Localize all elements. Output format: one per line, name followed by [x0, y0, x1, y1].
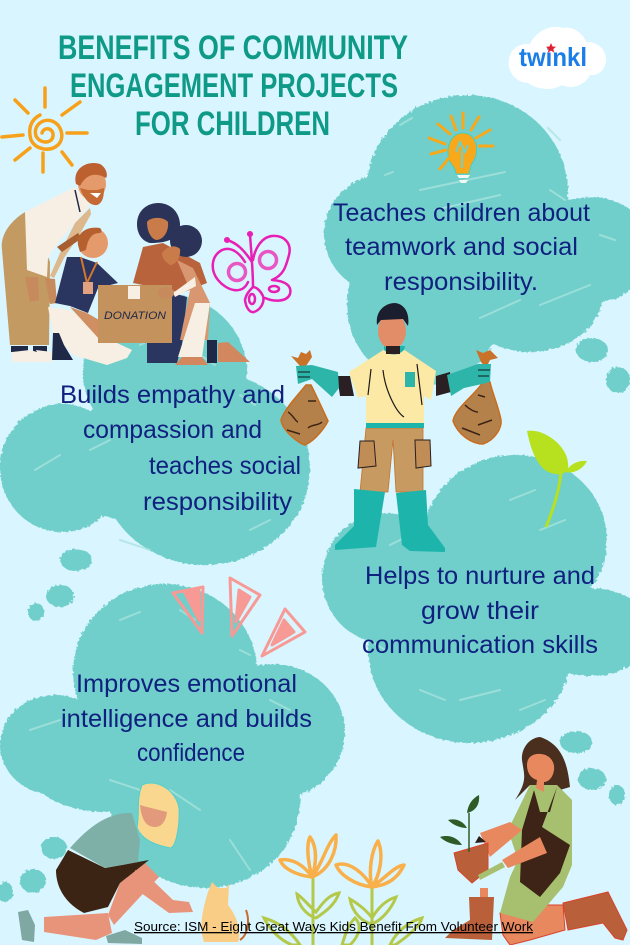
- boy legs and boots: [335, 428, 445, 552]
- boy torso: [349, 346, 436, 428]
- woman dress: [500, 785, 572, 922]
- title: ENGAGEMENT PROJECTS: [70, 67, 398, 105]
- text: teaches children: responsibility.: [384, 268, 538, 296]
- icon: paper arrows: [173, 578, 305, 656]
- woman legs: [445, 888, 627, 945]
- icon: light bulb: [429, 113, 493, 183]
- text: builds empathy: Builds empathy and: [60, 381, 285, 409]
- girl arm: [135, 870, 193, 913]
- cloud: middle left: [0, 294, 310, 565]
- illustration: girl gardening: [18, 783, 248, 944]
- standing man: [2, 163, 107, 362]
- woman forearm: [502, 837, 547, 868]
- title: [58, 29, 408, 143]
- text: helps nurture: Helps to nurture and: [365, 562, 595, 590]
- text: improves emotional intelligence: confidence: [137, 739, 245, 767]
- donation box: DONATION: [104, 310, 166, 322]
- text: builds empathy: responsibility: [143, 488, 293, 516]
- source line: Source: ISM - Eight Great Ways Kids Benefit From Volunteer Work: [134, 919, 534, 934]
- text: teaches children: [333, 199, 590, 296]
- woman arms: [480, 822, 522, 857]
- cloud texture: [30, 118, 615, 870]
- right bag: [453, 350, 501, 444]
- woman face: [527, 754, 554, 792]
- cat: [201, 882, 248, 942]
- donation box: [98, 285, 172, 343]
- text: teaches children: Teaches children about: [333, 199, 590, 227]
- arrow 3: [262, 609, 305, 656]
- icon: sun: [2, 88, 87, 172]
- illustration: woman planting: [440, 737, 627, 945]
- girl shirt: [70, 813, 140, 868]
- text: builds empathy: compassion and: [83, 416, 262, 444]
- cloud: bottom left: [0, 584, 345, 888]
- text: teaches children: teamwork and social: [345, 233, 578, 261]
- cloud: top right: [324, 95, 630, 385]
- girl shorts: [56, 850, 149, 913]
- left bag: [281, 350, 328, 445]
- girl hair and face: [137, 783, 179, 848]
- arrow 2: [230, 578, 260, 636]
- illustration: boy holding rubbish bags: [281, 303, 501, 552]
- woman hair: [515, 737, 570, 800]
- cloud: middle right: [322, 455, 630, 743]
- title: FOR CHILDREN: [135, 105, 330, 143]
- arrow 1: [173, 587, 203, 633]
- text: helps nurture: communication skills: [362, 631, 598, 659]
- illustration: family with donation box: [2, 163, 250, 365]
- woman: [133, 203, 217, 363]
- text: builds empathy: teaches social: [149, 452, 301, 480]
- child hugging: [158, 225, 250, 365]
- logo: twinkl: [509, 27, 606, 89]
- girl legs: [18, 863, 159, 944]
- icon: butterfly: [213, 232, 290, 312]
- boy arms and gloves: [296, 364, 491, 397]
- title: BENEFITS OF COMMUNITY: [58, 29, 408, 67]
- text: helps nurture: grow their: [421, 597, 539, 625]
- text: improves emotional intelligence: [61, 670, 312, 767]
- boy head: [377, 303, 408, 354]
- small cloud dots: [0, 338, 630, 902]
- woman apron: [520, 787, 570, 897]
- text: improves emotional intelligence: intelligence and builds: [61, 705, 312, 733]
- kneeling man with lanyard: [48, 228, 132, 365]
- icon: sprout: [527, 431, 587, 527]
- flowers: [264, 835, 422, 945]
- text: helps nurture: [362, 562, 598, 659]
- logo: twinkl: twinkl: [519, 42, 587, 72]
- plant pot: [440, 795, 505, 883]
- text: builds empathy: [60, 381, 301, 516]
- text: improves emotional intelligence: Improves emotional: [76, 670, 297, 698]
